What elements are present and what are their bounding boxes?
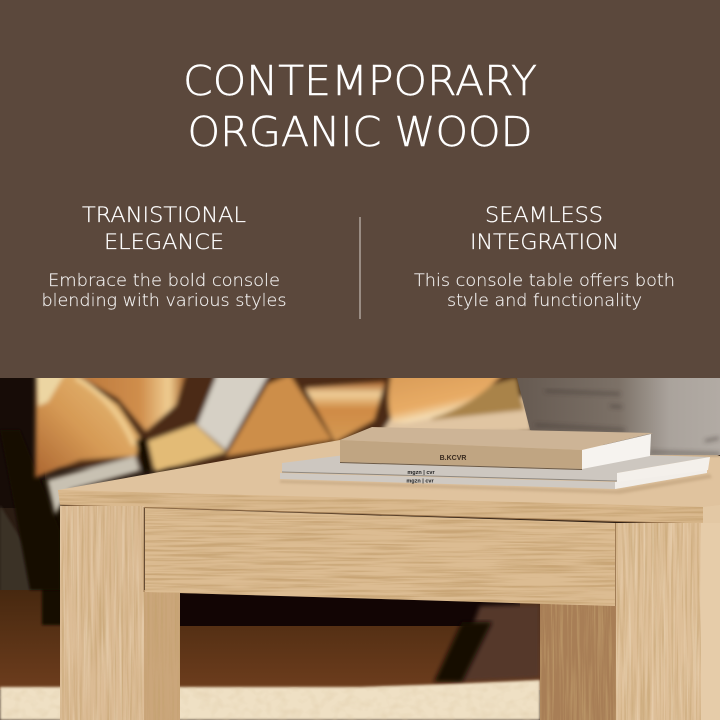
body text: seamless integration: This console table offers both [414,271,675,291]
body text: transitional elegance: Embrace the bold console [48,271,280,291]
title: CONTEMPORARY [183,57,537,105]
room backdrop [0,378,720,720]
upper magazine: mgzn | cvr [407,470,435,476]
body text: transitional elegance: blending with various styles [42,291,286,311]
lower magazine: mgzn | cvr [406,478,434,484]
heading: transitional elegance [82,203,246,254]
body text: seamless integration: style and functionality [447,291,642,311]
firewood logs [35,372,532,515]
top book: B.KCVR [440,455,466,462]
body text: seamless integration [414,271,675,311]
photo: console table with books [0,372,720,720]
heading: transitional elegance: ELEGANCE [104,230,224,254]
upper magazine [282,455,710,482]
heading: seamless integration: SEAMLESS [485,203,603,227]
panel: brown header background [0,0,720,378]
left front leg [60,506,144,720]
top book [340,427,653,470]
table top surface [58,440,720,507]
lower magazine [280,469,707,489]
rug [0,675,545,720]
book shadow [280,474,712,494]
heading: transitional elegance: TRANISTIONAL [82,203,246,227]
heading: seamless integration: INTEGRATION [470,230,619,254]
title: ORGANIC WOOD [188,108,532,156]
table apron [145,505,616,608]
table back legs [144,590,616,720]
divider line [360,217,361,319]
table top front edge [58,490,720,523]
stack of books [280,427,712,494]
text block: seamless integration [414,203,675,311]
right front leg [615,523,720,720]
vase [517,378,720,455]
body text: transitional elegance [42,271,286,311]
heading: seamless integration [470,203,619,254]
title [183,57,537,156]
text block: transitional elegance [42,203,286,311]
fan-shaped log [35,372,140,478]
